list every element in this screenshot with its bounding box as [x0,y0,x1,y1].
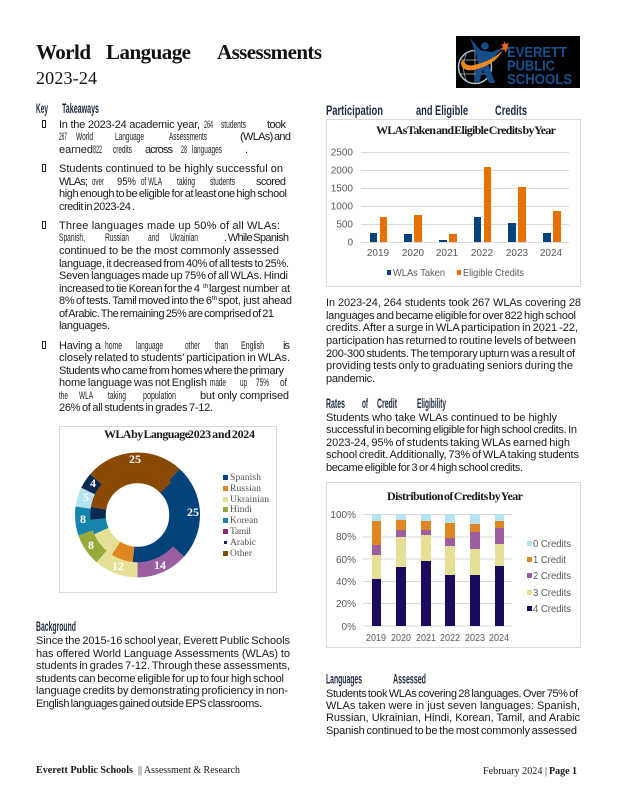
gridlines and y axis [330,510,512,633]
text block: languages assessed: Russian, Ukrainian, Hindi, Korean, Tamil, and Arabic [326,712,580,724]
chart title: Distribution of Credits by Year [387,489,524,503]
donut legend [223,473,269,559]
text block: takeaway 4: 26% of all students in grades 7-12. [59,402,213,414]
x axis years: 2020 [391,633,411,644]
donut value labels: 25 [129,452,141,466]
chart legend: 2 Credits [533,570,571,582]
chart title: WLAs Taken and Eligible Credits by Year [376,123,557,137]
gridlines and y axis: 2000 [331,166,353,176]
donut legend: Ukrainian [230,495,269,505]
text block: languages assessed: Spanish continued to be the most commonly assessed [326,725,577,737]
text block: languages assessed [326,688,580,737]
heading: Participation and Eligible Credits [326,103,527,118]
text block: takeaway 3: and [148,232,159,244]
logo: Everett Public Schools [456,36,580,88]
gridlines and y axis: 0% [342,622,356,633]
text block: takeaway 3: increased to tie Korean for the 4 [59,283,200,295]
text block: takeaway 1: students [221,119,246,131]
text block: participation: In 2023-24, 264 students took 267 WLAs covering 28 [326,297,581,309]
text block: takeaway 3: 8% of tests. Tamil moved into the 6 [59,295,212,307]
donut value labels [80,452,199,573]
stacked bar chart panel: Distribution of Credits by Year [326,482,580,648]
chart legend: 1 Credit [533,554,566,566]
footer: right: Page 1 [549,766,577,777]
text block: takeaway 1: across [145,144,174,156]
text block: takeaway 4: of [280,377,288,389]
heading: Rates of Credit Eligibility: Credit [377,396,397,411]
text block: takeaway 4: taking [108,390,126,402]
donut legend: Tamil [230,527,251,537]
text block: takeaway 1: World [76,131,93,143]
heading: Languages Assessed: Languages [326,672,362,686]
x axis years [366,633,509,644]
text block: takeaway 1: (WLAs) and [240,131,291,143]
x axis years: 2019 [367,248,390,259]
gridlines and y axis: 20% [336,599,356,610]
text block: background: English languages gained outside EPS classrooms. [36,698,262,710]
text block: background: has offered World Language Assessments (WLAs) to [36,648,290,660]
x axis years: 2023 [506,248,529,259]
text block: takeaway 4: home language was not English [59,377,207,389]
text block: takeaway 1: . [245,144,248,156]
chart title [104,427,255,441]
donut value labels: 5 [83,490,89,504]
text block: takeaway 4: WLA [79,390,93,402]
gridlines and y axis: 1000 [331,202,353,212]
footer: left: || Assessment & Research [138,765,240,776]
text block: participation: participation has returned to routine levels of between [326,335,576,347]
text block: takeaway 4: the [59,390,68,402]
title [36,40,322,64]
text block: takeaway 3: Ukrainian [170,232,198,244]
donut value labels: 25 [187,505,199,519]
text block: background: language credits by demonstrating proficiency in non- [36,685,288,697]
bar chart panel: WLAs Taken and Eligible Credits by Year [326,120,580,286]
text block: takeaway 2: WLAs; [59,176,88,188]
text block: takeaway 3: . While Spanish [224,232,289,244]
heading: Participation and Eligible Credits: and Eligible [416,103,468,118]
text block: takeaway 1: earned [59,144,93,156]
text block: takeaway 1: took [267,119,286,131]
text block: takeaway 2: over [92,176,104,188]
title: World [36,40,91,64]
gridlines and y axis: 100% [330,510,356,521]
x axis years: 2021 [436,248,459,259]
text block: takeaway 1 [42,119,291,156]
text block: takeaway 2: taking [177,176,195,188]
stacked bars [372,514,504,626]
bar: 2021 [421,514,431,626]
text block: credit eligibility: Students who take WLAs continued to be highly [326,412,558,424]
text block: participation: 200-300 students. The temporary upturn was a result of [326,348,576,360]
text block: takeaway 4: English [241,340,264,352]
gridlines and y axis: 60% [336,555,356,566]
text block: background: students can become eligible for up to four high school [36,673,284,685]
text block: takeaway 4: language [136,340,163,352]
text block: takeaway 3: continued to be the most commonly assessed [59,245,279,257]
text block: takeaway 2: of WLA [141,176,162,188]
text block: takeaway 3 [42,220,292,332]
title: Assessments [217,40,322,64]
text block: takeaway 3: Spanish, [59,232,85,244]
text block: takeaway 4: population [143,390,176,402]
text block: credit eligibility: 2023-24, 95% of students taking WLAs earned high [326,437,570,449]
x axis years: 2020 [402,248,425,259]
text block: takeaway 3: Seven languages made up 75% of all WLAs. Hindi [59,270,288,282]
gridlines and y axis: 0 [347,238,353,248]
heading: Rates of Credit Eligibility: Rates [326,396,345,411]
donut legend: Hindi [230,505,252,515]
text block: takeaway 1: 267 [59,131,67,143]
text block: background [36,635,290,710]
chart legend: Eligible Credits [463,267,524,279]
text block: takeaway 4 [42,340,290,414]
text block: takeaway 4: than [215,340,228,352]
chart legend [527,538,571,615]
text block: languages assessed: WLAs taken were in just seven languages: Spanish, [326,700,580,712]
x axis years: 2021 [416,633,436,644]
donut value labels: 14 [154,558,166,572]
footer: right: February 2024 | [483,766,547,777]
text block: takeaway 2: students [210,176,235,188]
donut legend: Other [230,549,253,559]
heading: Languages Assessed: Assessed [393,672,426,686]
text block: takeaway 1: 264 [204,119,213,131]
text block: credit eligibility: became eligible for 3 or 4 high school credits. [326,462,523,474]
donut legend: Korean [230,516,258,526]
text block: takeaway 4: made [210,377,226,389]
text block: takeaway 1: Assessments [169,131,207,143]
text block: takeaway 4: home [105,340,122,352]
text: Eligibility [417,396,446,411]
donut rings [83,460,192,570]
text block: takeaway 3: th [212,295,218,302]
donut value labels: 12 [112,559,124,573]
donut legend: Russian [230,484,261,494]
title: Language [106,40,191,64]
text block: takeaway 2: Students continued to be highly successful on [59,163,283,175]
text block: participation: languages and became eligible for over 822 high school [326,310,576,322]
gridlines and y axis [331,148,569,248]
text block: takeaway 1: languages [192,144,222,156]
heading: Rates of Credit Eligibility [326,396,446,411]
donut legend: Arabic [230,538,256,548]
gridlines and y axis: 1500 [331,184,353,194]
footer: right [483,766,577,777]
donut value labels: 8 [88,538,94,552]
text block: takeaway 3: Russian [105,232,129,244]
bar: 2023 [470,514,480,626]
donut legend: Spanish [230,473,261,483]
gridlines and y axis: 2500 [331,148,353,158]
text block: takeaway 1: 28 [181,144,187,156]
x axis years: 2024 [489,633,509,644]
text block: takeaway 2 [42,163,287,213]
text block: takeaway 3: of Arabic. The remaining 25% are comprised of 21 [59,308,274,320]
heading: Key Takeaways [36,101,99,116]
logo: Everett Public Schools: EVERETT [507,45,567,61]
text block: background: students in grades 7-12. Through these assessments, [36,660,290,672]
text block: takeaway 2: high enough to be eligible for at least one high school [59,188,287,200]
heading: Participation and Eligible Credits: Participation [326,103,383,118]
x axis years: 2024 [540,248,563,259]
heading: Rates of Credit Eligibility: of [362,396,368,411]
text block: participation [326,297,581,385]
subtitle: year: 2023-24 [36,68,97,88]
text block: takeaway 3: spot, just ahead [218,295,292,307]
logo: Everett Public Schools: SCHOOLS [507,72,572,88]
text block: credit eligibility: successful in becoming eligible for high school credits. In [326,424,577,436]
text block: credit eligibility: school credit. Additionally, 73% of WLA taking students [326,449,580,461]
chart title: 2023 and 2024 [188,427,255,441]
chart legend: WLAs Taken [393,267,445,279]
text block: takeaway 4: up [240,377,247,389]
text block: takeaway 3: th [203,283,209,290]
text block: takeaway 4: but only comprised [200,390,289,402]
donut value labels: 4 [90,476,96,490]
bar: 2024 [495,514,504,626]
text block: takeaway 1: 822 [93,144,102,156]
heading: Participation and Eligible Credits: Credits [495,103,527,118]
text block: takeaway 3: largest number at [209,283,290,295]
text block: participation: providing tests only to graduating seniors during the [326,360,573,372]
footer: left [36,765,240,776]
bar: 2019 [372,514,381,626]
heading: Key Takeaways: Key [36,101,48,116]
text block: takeaway 3: Three languages made up 50% of all WLAs: [59,220,280,232]
text block: participation: credits. After a surge in WLA participation in 2021 -22, [326,322,578,334]
x axis years: 2019 [366,633,386,644]
logo: Everett Public Schools: PUBLIC [507,58,555,74]
text block: participation: pandemic. [326,373,375,385]
gridlines and y axis: 80% [336,532,356,543]
bars: Eligible Credits [380,167,561,242]
text block: takeaway 2: credit in 2023-24 . [59,201,135,213]
text block: takeaway 1: In the 2023-24 academic year, [59,119,200,131]
text block: takeaway 3: language, it decreased from 40% of all tests to 25%. [59,258,289,270]
chart legend [387,267,524,279]
text block: takeaway 1: Language [115,131,144,143]
bar: 2020 [396,514,406,626]
text block: takeaway 4: other [185,340,200,352]
text block: takeaway 1: credits [113,144,132,156]
text block: credit eligibility [326,412,580,474]
text block: background: Since the 2015-16 school year, Everett Public Schools [36,635,290,647]
footer: left: Everett Public Schools [36,765,133,776]
x axis years: 2022 [440,633,460,644]
heading: Key Takeaways: Takeaways [62,101,99,116]
text block: takeaway 3: languages. [59,320,110,332]
chart legend: 4 Credits [533,603,571,615]
heading: Background: Background [36,619,76,634]
x axis years: 2022 [471,248,494,259]
gridlines and y axis: 40% [336,577,356,588]
text block: takeaway 2: scored [256,176,286,188]
text block: takeaway 4: closely related to students' participation in WLAs. [59,352,290,364]
text block: takeaway 4: Students who came from homes where the primary [59,365,284,377]
donut chart panel: WLA by Language [60,426,276,592]
chart legend: 0 Credits [533,538,571,550]
text block: takeaway 4: 75% [256,377,269,389]
chart title: WLA by Language [104,427,191,441]
bar: 2022 [445,514,455,626]
x axis years: 2023 [465,633,485,644]
chart legend: 3 Credits [533,587,571,599]
text block: languages assessed: Students took WLAs covering 28 languages. Over 75% of [326,688,579,700]
gridlines and y axis: 500 [336,220,353,230]
bars: WLAs Taken [370,217,551,242]
text block: takeaway 4: Having a [59,340,102,352]
text block: takeaway 4: is [283,340,290,352]
x axis years [367,248,563,259]
text block: takeaway 2: 95% [117,176,136,188]
donut value labels: 8 [80,512,86,526]
